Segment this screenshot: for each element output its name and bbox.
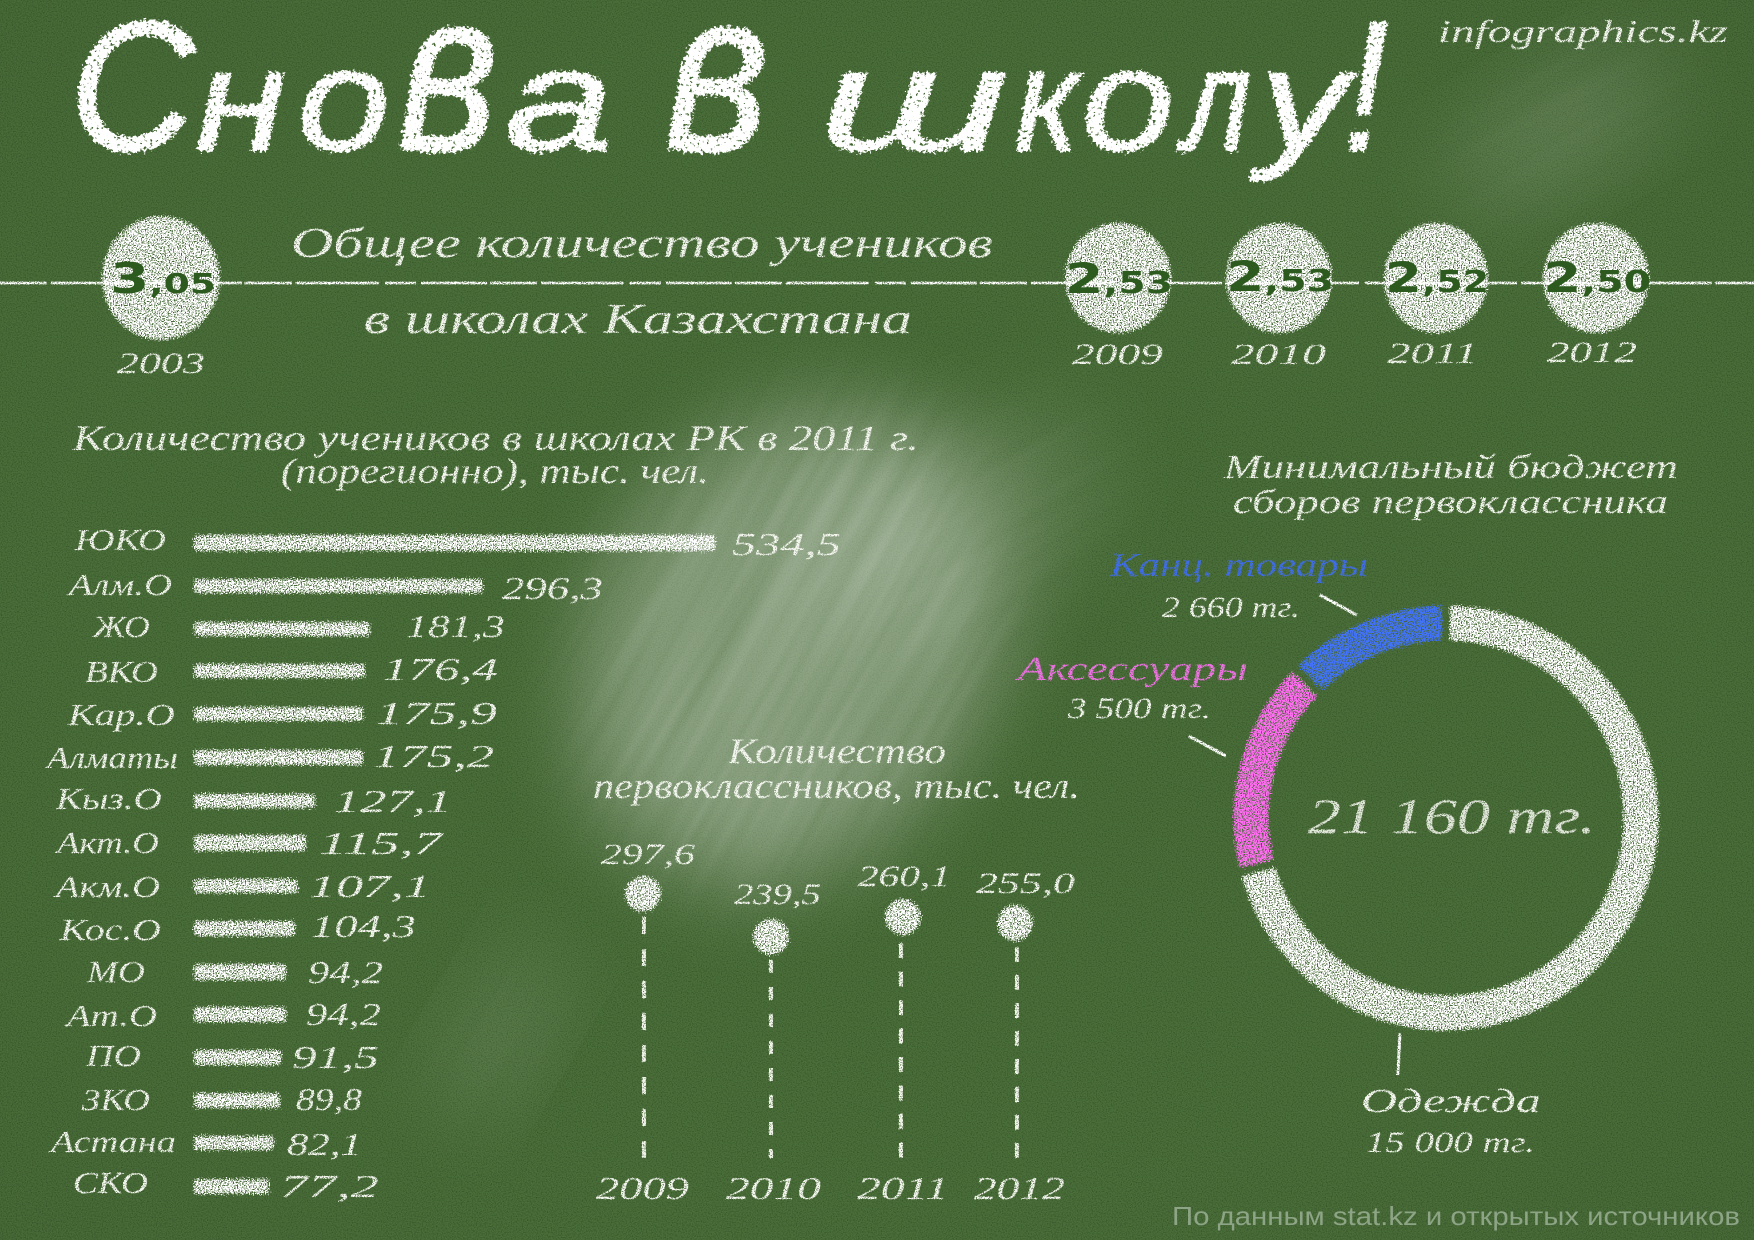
circle 2009 (1061, 219, 1175, 371)
circle 2003: 3 ,05 (110, 254, 216, 303)
circle 2003: 2003 (117, 347, 205, 380)
circle 2012 (1539, 219, 1653, 369)
heading: budget: Минимальный бюджет (1223, 449, 1678, 486)
circle 2011: 2 ,52 (1385, 253, 1489, 302)
timeline chalk line (0, 282, 1754, 284)
region values: 176,4 (383, 651, 498, 687)
region labels: ЮКО (74, 522, 166, 557)
site name: infographics.kz (1438, 13, 1729, 49)
region labels: Кыз.О (55, 781, 162, 816)
region labels: Алматы (45, 740, 178, 775)
region values: 91,5 (292, 1039, 379, 1075)
circle 2012: 2012 (1547, 336, 1637, 369)
lollipop dashed stems (644, 917, 1017, 1158)
heading: budget: сборов первоклассника (1233, 484, 1668, 521)
circle 2010: 2010 (1231, 338, 1326, 371)
region labels: ЗКО (82, 1082, 150, 1117)
region values: 104,3 (311, 908, 416, 944)
region values: 534,5 (732, 526, 841, 562)
heading: budget (1223, 449, 1678, 521)
title: о (298, 19, 390, 181)
heading: total students: Общее количество учеников (291, 221, 993, 267)
first grader years: 2010 (726, 1170, 821, 1206)
circle 2011: 2011 (1387, 337, 1478, 370)
region labels: ПО (85, 1038, 141, 1073)
first grader values: 239,5 (734, 878, 821, 911)
label: stationery: 2 660 тг. (1162, 591, 1300, 624)
bar chart (190, 531, 719, 1198)
title: ш (820, 19, 1008, 181)
donut total: 21 160 тг. (1308, 788, 1596, 844)
heading: students by region: (порегионно), тыс. чел. (281, 451, 709, 491)
region labels: ЖО (92, 609, 150, 644)
region values: 89,8 (296, 1081, 362, 1117)
title: к (1015, 19, 1084, 181)
region labels: Ат.О (64, 998, 157, 1033)
label: clothing: Одежда (1361, 1083, 1541, 1120)
region labels: Кос.О (59, 912, 161, 947)
source note: По данным stat.kz и открытых источников (1172, 1201, 1740, 1231)
heading: first graders: Количество (727, 731, 946, 771)
segment: accessories (1251, 681, 1308, 868)
first grader years: 2012 (974, 1170, 1065, 1206)
region values: 175,2 (373, 738, 494, 774)
circle 2009: 2 ,53 (1065, 254, 1173, 303)
label: stationery (1109, 547, 1368, 624)
segment: clothing (1258, 623, 1641, 1013)
panel: first graders (593, 731, 1080, 1206)
region labels: Кар.О (67, 697, 175, 732)
label: stationery: Канц. товары (1109, 547, 1368, 584)
heading: students by region: Количество учеников в школах РК в 2011 г. (72, 418, 919, 458)
first grader years (596, 1170, 1065, 1206)
region labels: ВКО (85, 654, 158, 689)
region values: 94,2 (306, 996, 381, 1032)
title: а (505, 19, 613, 181)
region labels: Акт.О (55, 825, 159, 860)
region labels (45, 522, 178, 1200)
region labels: Астана (49, 1124, 176, 1159)
heading: first graders (593, 731, 1080, 806)
heading: first graders: первоклассников, тыс. чел. (593, 766, 1080, 806)
title: л (1177, 19, 1251, 181)
circle 2009: 2009 (1072, 338, 1163, 371)
panel: first grader budget (1015, 449, 1678, 1159)
region values: 94,2 (308, 954, 383, 990)
title: у (1249, 19, 1357, 181)
region values: 107,1 (309, 868, 431, 904)
title: н (196, 19, 286, 181)
region values: 181,3 (406, 608, 505, 644)
donut chart (1251, 623, 1641, 1013)
region labels: СКО (73, 1165, 148, 1200)
region values: 296,3 (502, 570, 603, 606)
circle 2010: 2 ,53 (1226, 252, 1334, 301)
first grader years: 2011 (857, 1170, 949, 1206)
region labels: Алм.О (66, 567, 172, 602)
circle 2003 (98, 212, 224, 380)
first grader years: 2009 (596, 1170, 689, 1206)
label: clothing: 15 000 тг. (1366, 1126, 1535, 1159)
heading: total students: в школах Казахстана (364, 297, 912, 343)
first grader values: 297,6 (601, 838, 695, 871)
first grader values (601, 838, 1075, 911)
heading: total students (291, 221, 993, 343)
label: accessories (1015, 651, 1248, 756)
title: о (1082, 19, 1174, 181)
region values: 127,1 (334, 783, 452, 819)
segment: stationery (1308, 623, 1446, 681)
region values: 115,7 (319, 825, 446, 861)
lollipop dots (621, 872, 1037, 959)
region labels: МО (86, 954, 145, 989)
label: accessories: 3 500 тг. (1067, 692, 1211, 725)
panel: total students timeline (0, 212, 1754, 380)
region values: 175,9 (376, 695, 497, 731)
circle 2010 (1222, 219, 1336, 371)
label: accessories: Аксессуары (1015, 651, 1248, 688)
region values: 77,2 (280, 1168, 379, 1204)
region values (280, 526, 841, 1204)
circle 2011 (1380, 219, 1492, 370)
region values: 82,1 (287, 1126, 362, 1162)
title (70, 0, 1388, 199)
panel: students by region (45, 418, 919, 1204)
first grader values: 255,0 (976, 867, 1075, 900)
label: clothing (1361, 1033, 1541, 1159)
circle 2012: 2 ,50 (1543, 253, 1651, 302)
region labels: Акм.О (54, 869, 160, 904)
heading: students by region (72, 418, 919, 491)
first grader values: 260,1 (858, 860, 951, 893)
